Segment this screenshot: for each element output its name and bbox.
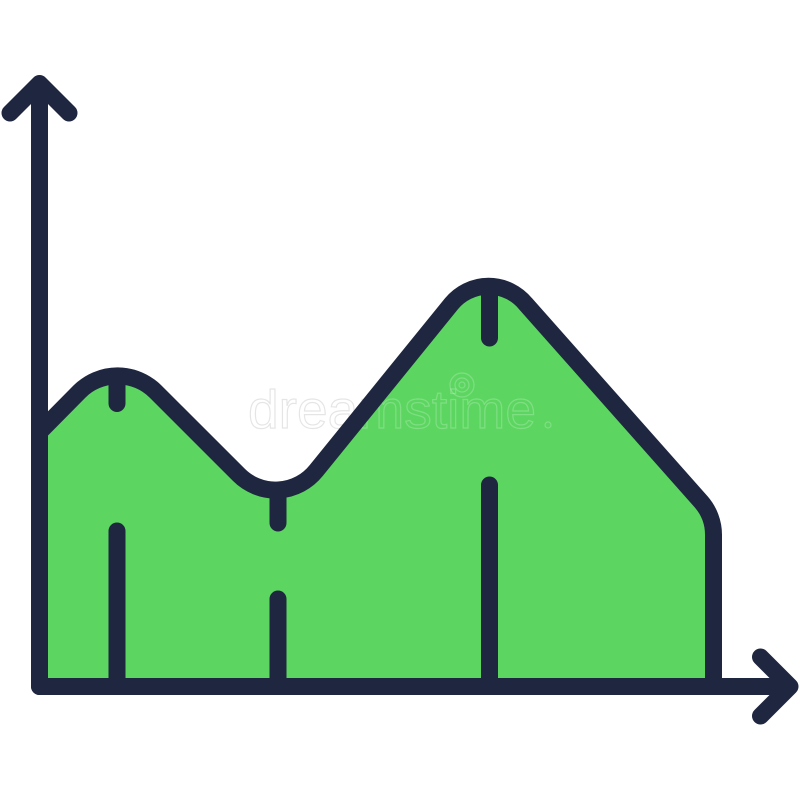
green area — [40, 286, 714, 686]
vertical drop lines — [117, 290, 490, 686]
curve outline — [40, 286, 714, 686]
x axis arrow — [40, 657, 790, 716]
y axis arrow — [10, 84, 69, 686]
watermark on green area — [362, 372, 552, 430]
watermark on white background: dreamstime — [248, 380, 536, 440]
watermark on green area: dreamstime — [248, 380, 536, 440]
